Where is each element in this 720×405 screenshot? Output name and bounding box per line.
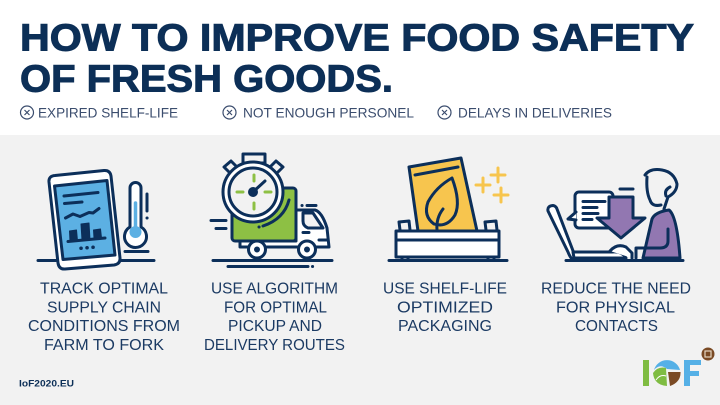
label: reduce physical contacts: CONTACTS bbox=[575, 318, 658, 335]
icon: stopwatch and delivery truck bbox=[211, 154, 332, 266]
label: reduce physical contacts bbox=[541, 280, 691, 335]
panel: background band bbox=[0, 135, 720, 405]
problem: not enough personel: NOT ENOUGH PERSONEL bbox=[243, 104, 414, 120]
label: algorithm routes: FOR OPTIMAL bbox=[224, 299, 327, 316]
label: algorithm routes: USE ALGORITHM bbox=[211, 280, 338, 297]
title bbox=[20, 18, 694, 100]
title: HOW TO IMPROVE FOOD SAFETY bbox=[20, 18, 694, 60]
label: shelf-life packaging bbox=[383, 280, 507, 335]
label: shelf-life packaging: OPTIMIZED bbox=[397, 299, 493, 316]
label: algorithm routes: DELIVERY ROUTES bbox=[204, 337, 345, 354]
icon: tablet and thermometer bbox=[38, 170, 154, 269]
problem: delays in deliveries: DELAYS IN DELIVERIES bbox=[458, 104, 612, 120]
icon: leaf packaging bbox=[389, 158, 508, 260]
problem: expired shelf-life: EXPIRED SHELF-LIFE bbox=[38, 104, 178, 120]
label: reduce physical contacts: REDUCE THE NEED bbox=[541, 280, 691, 297]
title: OF FRESH GOODS. bbox=[20, 58, 393, 100]
label: algorithm routes bbox=[204, 280, 345, 354]
label: track optimal conditions: TRACK OPTIMAL bbox=[40, 280, 168, 297]
label: track optimal conditions: FARM TO FORK bbox=[44, 337, 165, 354]
label: track optimal conditions: SUPPLY CHAIN bbox=[47, 299, 161, 316]
label: algorithm routes: PICKUP AND bbox=[228, 318, 322, 335]
icon: person at laptop with message bbox=[548, 170, 683, 260]
label: shelf-life packaging: USE SHELF-LIFE bbox=[383, 280, 507, 297]
label: track optimal conditions bbox=[28, 280, 180, 354]
logo: IoF bbox=[643, 348, 714, 386]
label: shelf-life packaging: PACKAGING bbox=[398, 318, 492, 335]
website link: IoF2020.EU bbox=[19, 379, 74, 390]
label: track optimal conditions: CONDITIONS FROM bbox=[28, 318, 180, 335]
label: reduce physical contacts: FOR PHYSICAL bbox=[556, 299, 675, 316]
